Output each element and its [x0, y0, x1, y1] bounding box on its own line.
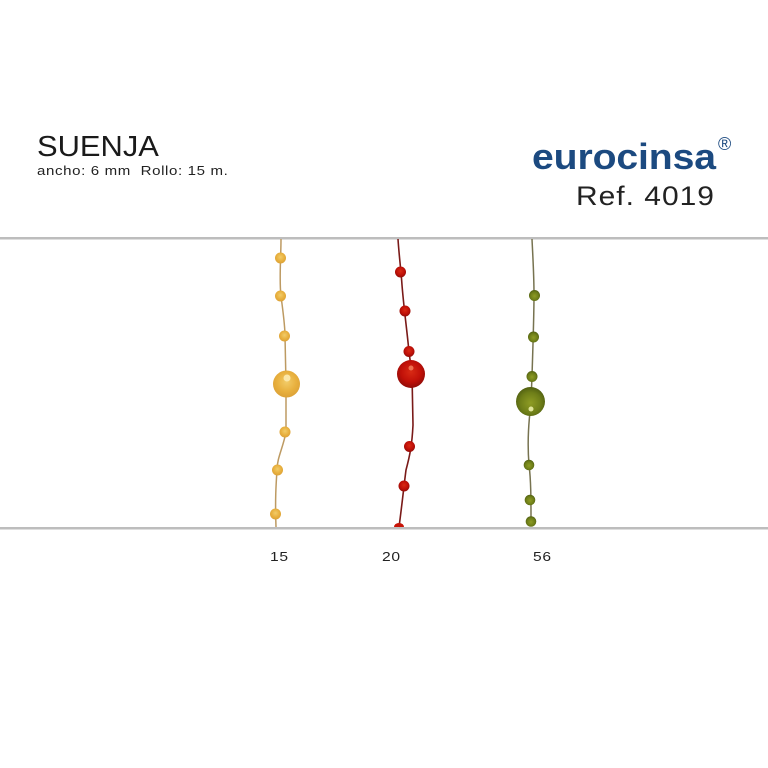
colour code 20: 20	[382, 549, 401, 564]
reference number: Ref. 4019	[576, 180, 715, 210]
olive bead strand	[516, 239, 545, 527]
registered trademark mark: ®	[718, 134, 731, 154]
brand logo: eurocinsa: eurocinsa	[532, 136, 716, 177]
colour code 56: 56	[533, 549, 552, 564]
bottom rule	[0, 527, 768, 530]
colour code 15: 15	[270, 549, 289, 564]
top rule	[0, 237, 768, 240]
red bead strand	[394, 239, 425, 527]
product dimensions text: ancho: 6 mm Rollo: 15 m.	[37, 162, 228, 178]
title: SUENJA	[37, 130, 159, 162]
gold bead strand	[270, 239, 300, 527]
